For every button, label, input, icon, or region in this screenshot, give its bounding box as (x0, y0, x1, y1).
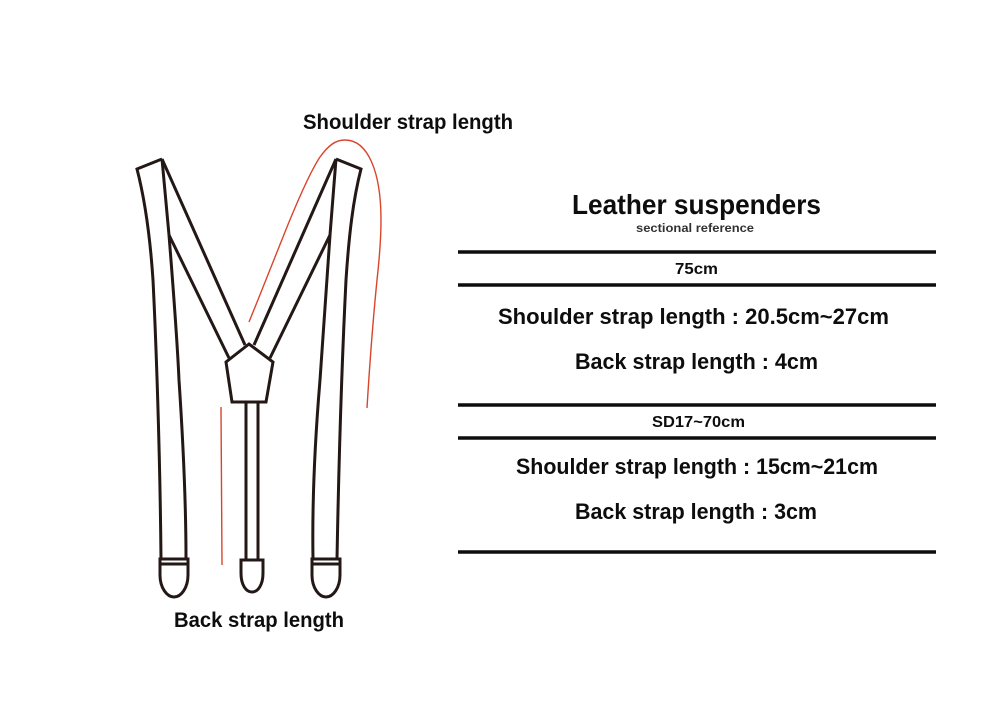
suspenders diagram (137, 159, 361, 597)
table: 75cm (458, 252, 936, 374)
centre pentagon clip (226, 344, 273, 402)
label: shoulder strap length: Shoulder strap length (303, 111, 513, 134)
red measure line: back strap (221, 407, 222, 565)
right clip (312, 559, 340, 597)
red measure line: shoulder strap (249, 140, 381, 408)
right strap (254, 159, 361, 559)
size heading SD17~70cm: SD17~70cm (652, 414, 745, 431)
back strap SD17: Back strap length : 3cm (575, 499, 817, 524)
back strap 75cm: Back strap length : 4cm (575, 349, 818, 374)
table: SD17~70cm (458, 405, 936, 552)
back clip (241, 560, 263, 592)
back strap (246, 402, 258, 559)
size heading 75cm: 75cm (675, 261, 718, 278)
left clip (160, 559, 188, 597)
shoulder strap 75cm: Shoulder strap length : 20.5cm~27cm (498, 304, 889, 329)
subtitle: sectional reference (636, 221, 754, 235)
title: Leather suspenders (572, 189, 821, 220)
label: back strap length: Back strap length (174, 609, 344, 632)
left strap (137, 159, 245, 559)
shoulder strap SD17: Shoulder strap length : 15cm~21cm (516, 454, 878, 479)
